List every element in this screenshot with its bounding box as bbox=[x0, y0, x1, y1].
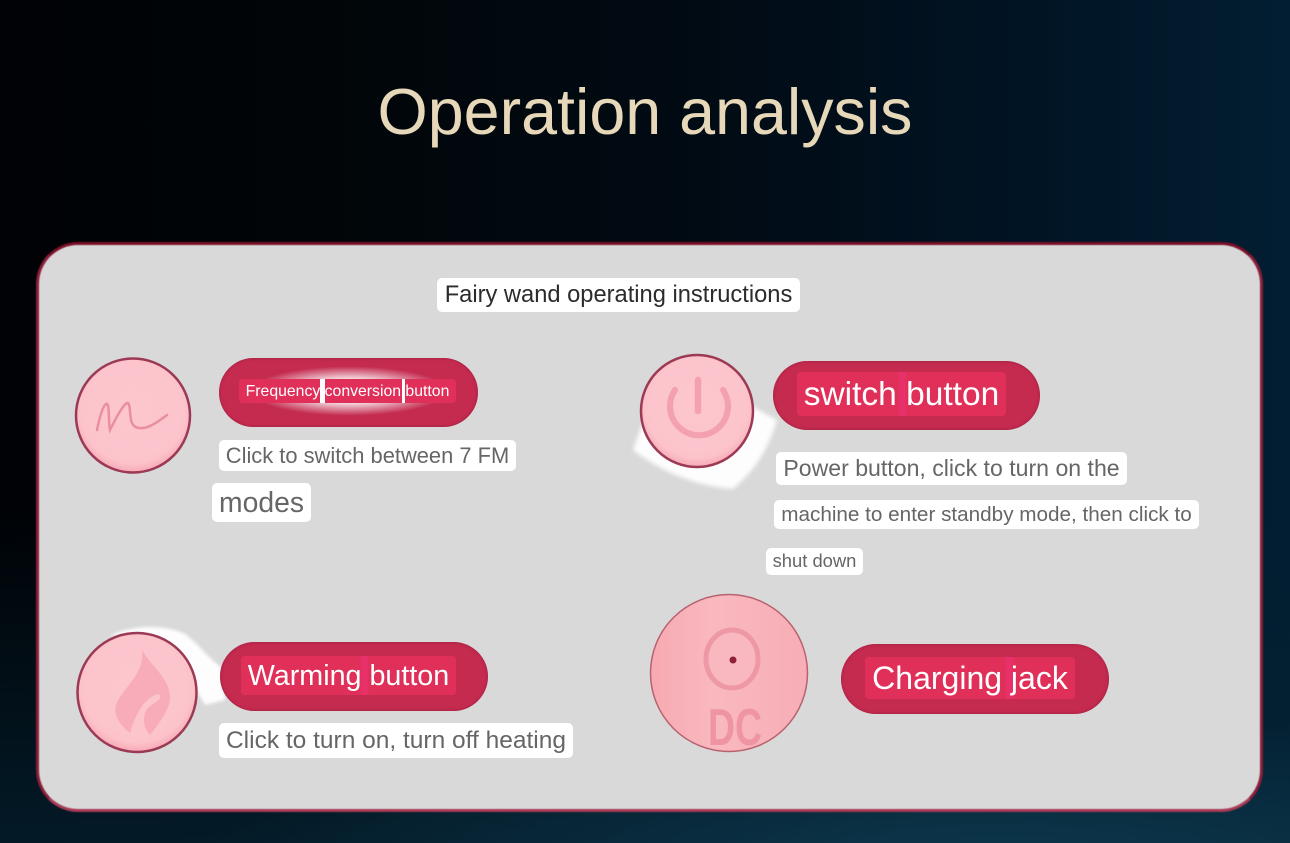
description: frequency line 2: modes bbox=[219, 486, 304, 518]
description: frequency line 1: Click to switch between 7 FM bbox=[226, 443, 509, 468]
description: switch line 3: shut down bbox=[773, 550, 856, 571]
pill: charging jack bbox=[841, 644, 1109, 714]
icon: power button bbox=[640, 354, 754, 468]
description: warming: Click to turn on, turn off heating bbox=[226, 727, 566, 754]
white smear behind power icon bbox=[632, 406, 778, 490]
tag label: Frequency conversion button bbox=[246, 383, 449, 400]
description: switch line 1: Power button, click to turn on the bbox=[783, 455, 1120, 481]
icon: DC charging jack bbox=[650, 594, 808, 755]
tag label: Charging jack bbox=[872, 660, 1068, 696]
panel: operating instructions bbox=[36, 242, 1263, 812]
description: switch line 2: machine to enter standby mode, then click to bbox=[781, 503, 1192, 526]
title: Operation analysis bbox=[378, 76, 912, 148]
tag label bbox=[239, 379, 456, 403]
tag label: switch button bbox=[804, 376, 999, 413]
pill: frequency conversion bbox=[219, 358, 478, 427]
icon: frequency button bbox=[74, 357, 192, 474]
description: switch line 3 bbox=[766, 548, 863, 575]
tag label: Warming button bbox=[248, 660, 449, 692]
panel heading: Fairy wand operating instructions bbox=[445, 282, 792, 308]
pill: warming button bbox=[220, 642, 488, 711]
icon: flame button bbox=[76, 632, 198, 754]
white smear behind flame icon bbox=[112, 626, 226, 706]
pill: switch button bbox=[773, 361, 1040, 430]
glow bbox=[249, 366, 449, 416]
